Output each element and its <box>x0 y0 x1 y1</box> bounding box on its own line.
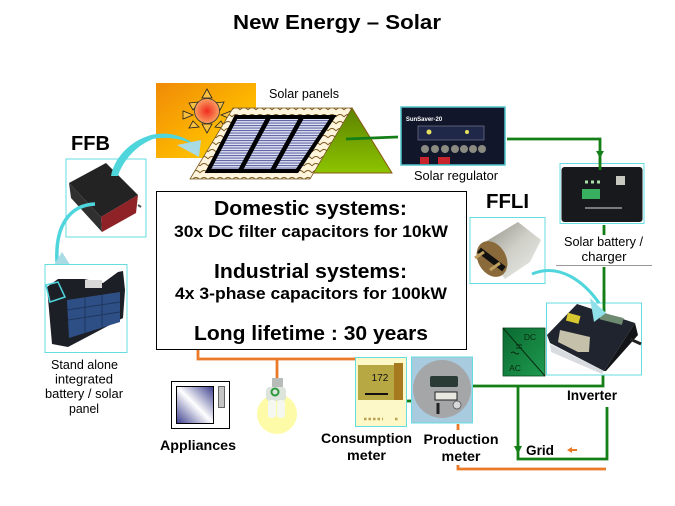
label: production meter: meter <box>442 449 481 464</box>
icon: solar panels <box>190 108 352 179</box>
central text panel: 30x DC filter capacitors for 10kW <box>174 223 448 241</box>
label: production meter: Production <box>424 432 498 447</box>
solar regulator <box>401 107 505 165</box>
label: consumption meter: Consumption <box>321 431 412 446</box>
production meter <box>412 357 472 423</box>
label: stand alone: integrated <box>55 372 113 386</box>
inverter <box>546 303 642 375</box>
label: consumption meter: meter <box>347 448 387 463</box>
central text panel: Long lifetime : 30 years <box>194 322 428 345</box>
icon: sun <box>156 83 256 158</box>
label: stand alone: Stand alone <box>51 358 118 372</box>
green wire into inverter <box>603 290 605 312</box>
DC/AC converter <box>503 328 545 376</box>
FFLI capacitor <box>470 218 545 284</box>
solar battery charger <box>560 164 644 224</box>
label: solar battery charger: Solar battery / <box>564 235 644 249</box>
arrow: FFB to panels <box>111 134 201 176</box>
appliances icon <box>172 382 230 428</box>
label: inverter: Inverter <box>567 388 618 403</box>
central text panel: Domestic systems: <box>214 197 407 220</box>
title: New Energy – Solar <box>233 11 441 34</box>
label: consumption meter <box>321 431 412 463</box>
orange wiring <box>198 350 606 469</box>
FFLI label: FFLI <box>486 191 529 213</box>
battery panel <box>45 264 127 352</box>
consumption meter: 172 <box>372 373 389 384</box>
label: stand alone <box>45 358 123 416</box>
green wiring <box>406 139 607 459</box>
arrow: grid orange <box>567 447 577 453</box>
icon: light bulb <box>257 378 297 434</box>
solar regulator: SunSaver-20 <box>406 117 443 123</box>
central text panel: Industrial systems: <box>214 260 407 283</box>
arrow: FFB to battery <box>52 204 95 268</box>
label: solar panels: Solar panels <box>269 87 339 101</box>
DC/AC converter: AC <box>509 363 521 373</box>
green wire: panels to regulator <box>346 137 398 139</box>
label: grid: Grid <box>526 443 554 458</box>
label: stand alone: battery / solar <box>45 387 123 401</box>
green wire over charger <box>599 158 601 170</box>
DC/AC converter: DC <box>524 332 536 342</box>
FFB capacitor <box>66 159 146 237</box>
label: solar battery charger <box>564 235 644 264</box>
central text panel: 4x 3-phase capacitors for 100kW <box>175 285 447 303</box>
consumption meter <box>356 358 406 426</box>
label: appliances: Appliances <box>160 438 236 453</box>
label: stand alone: panel <box>69 402 99 416</box>
arrow: FFLI to inverter <box>532 270 606 322</box>
panel stand triangle <box>310 108 392 173</box>
label: solar regulator: Solar regulator <box>414 169 498 183</box>
FFB label: FFB <box>71 133 110 155</box>
label: solar battery charger: charger <box>582 250 626 264</box>
label: production meter <box>424 432 498 464</box>
central text panel <box>156 192 466 350</box>
